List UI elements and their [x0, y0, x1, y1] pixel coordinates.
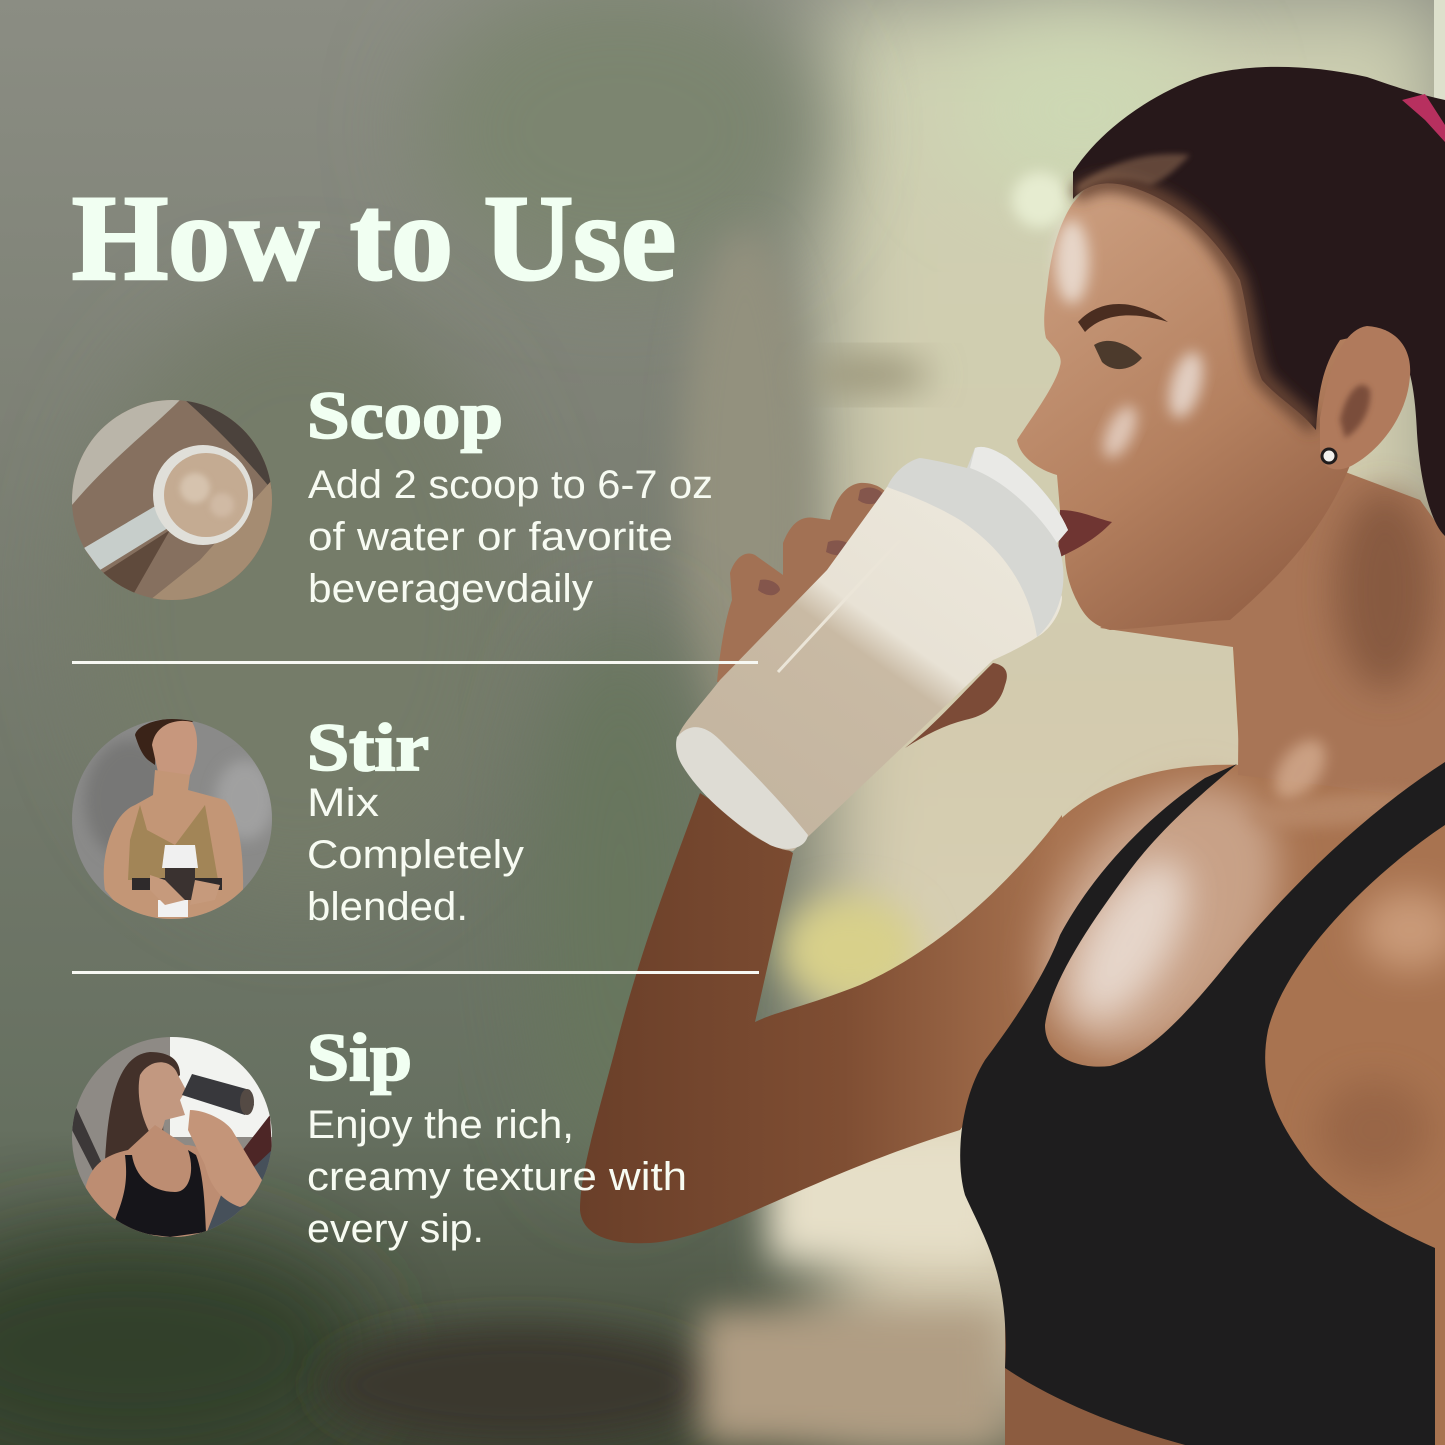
hair sheen: [1078, 154, 1190, 195]
shaker lid rim: [970, 447, 1068, 543]
eye: [1094, 341, 1142, 369]
step 1 description: [308, 463, 713, 611]
step 1 description: beveragevdaily: [308, 567, 593, 611]
lips: [1058, 510, 1112, 558]
chest base tone: [992, 740, 1328, 1100]
torso skin: [1005, 640, 1445, 1445]
forehead shine: [1055, 220, 1089, 304]
hand behind shaker: [717, 483, 1007, 748]
eyebrow: [1078, 304, 1168, 332]
armpit shadow: [1320, 1080, 1430, 1180]
step 3 photo: woman sipping: [72, 1037, 272, 1237]
step 2 description: Completely: [307, 833, 524, 877]
step 3 description: [307, 1103, 687, 1251]
shaker base: [676, 727, 808, 849]
chest highlight: [1049, 841, 1211, 1039]
step 3 heading: Sip: [307, 1019, 412, 1095]
step 1 description: Add 2 scoop to 6-7 oz: [308, 463, 713, 507]
thumb: [905, 663, 1007, 748]
title: How to Use: [72, 171, 676, 306]
step 2 photo: woman with shaker: [72, 718, 275, 920]
neck: [1100, 470, 1445, 800]
step 2 description: blended.: [307, 885, 468, 929]
step 1 description: of water or favorite: [308, 515, 673, 559]
earring: [1322, 449, 1336, 463]
sports bra: [960, 762, 1445, 1445]
hair tie: [1402, 94, 1445, 142]
step 3 description: creamy texture with: [307, 1155, 687, 1199]
arm: [580, 793, 1062, 1243]
palm: [717, 483, 890, 690]
step 2 description: [307, 781, 524, 929]
shoulder highlight: [1360, 890, 1445, 970]
shaker logo ridge: [778, 540, 900, 672]
ear: [1320, 326, 1410, 469]
shaker body: [677, 470, 1062, 851]
cheek shine: [1163, 348, 1209, 422]
step 3 description: Enjoy the rich,: [307, 1103, 574, 1147]
cheekbone shine: [1096, 401, 1144, 463]
hair: [1073, 67, 1445, 536]
underbust skin: [1005, 1368, 1185, 1445]
shaker lid: [887, 447, 1068, 637]
shaker bottle: [676, 447, 1068, 851]
step 2 description: Mix: [307, 781, 379, 825]
step 2 heading: Stir: [307, 709, 429, 785]
ear inner: [1340, 385, 1370, 438]
step 1 photo: scoop: [72, 400, 272, 600]
fingernails: [758, 488, 884, 595]
step 3 description: every sip.: [307, 1207, 484, 1251]
neck shadow: [1335, 490, 1435, 690]
collar shading: [1249, 786, 1431, 834]
woman drinking: [580, 67, 1445, 1445]
soft hairline: [1075, 183, 1315, 428]
collarbone highlight: [1264, 731, 1336, 809]
face: [1017, 172, 1370, 630]
step 1 heading: Scoop: [307, 377, 503, 453]
